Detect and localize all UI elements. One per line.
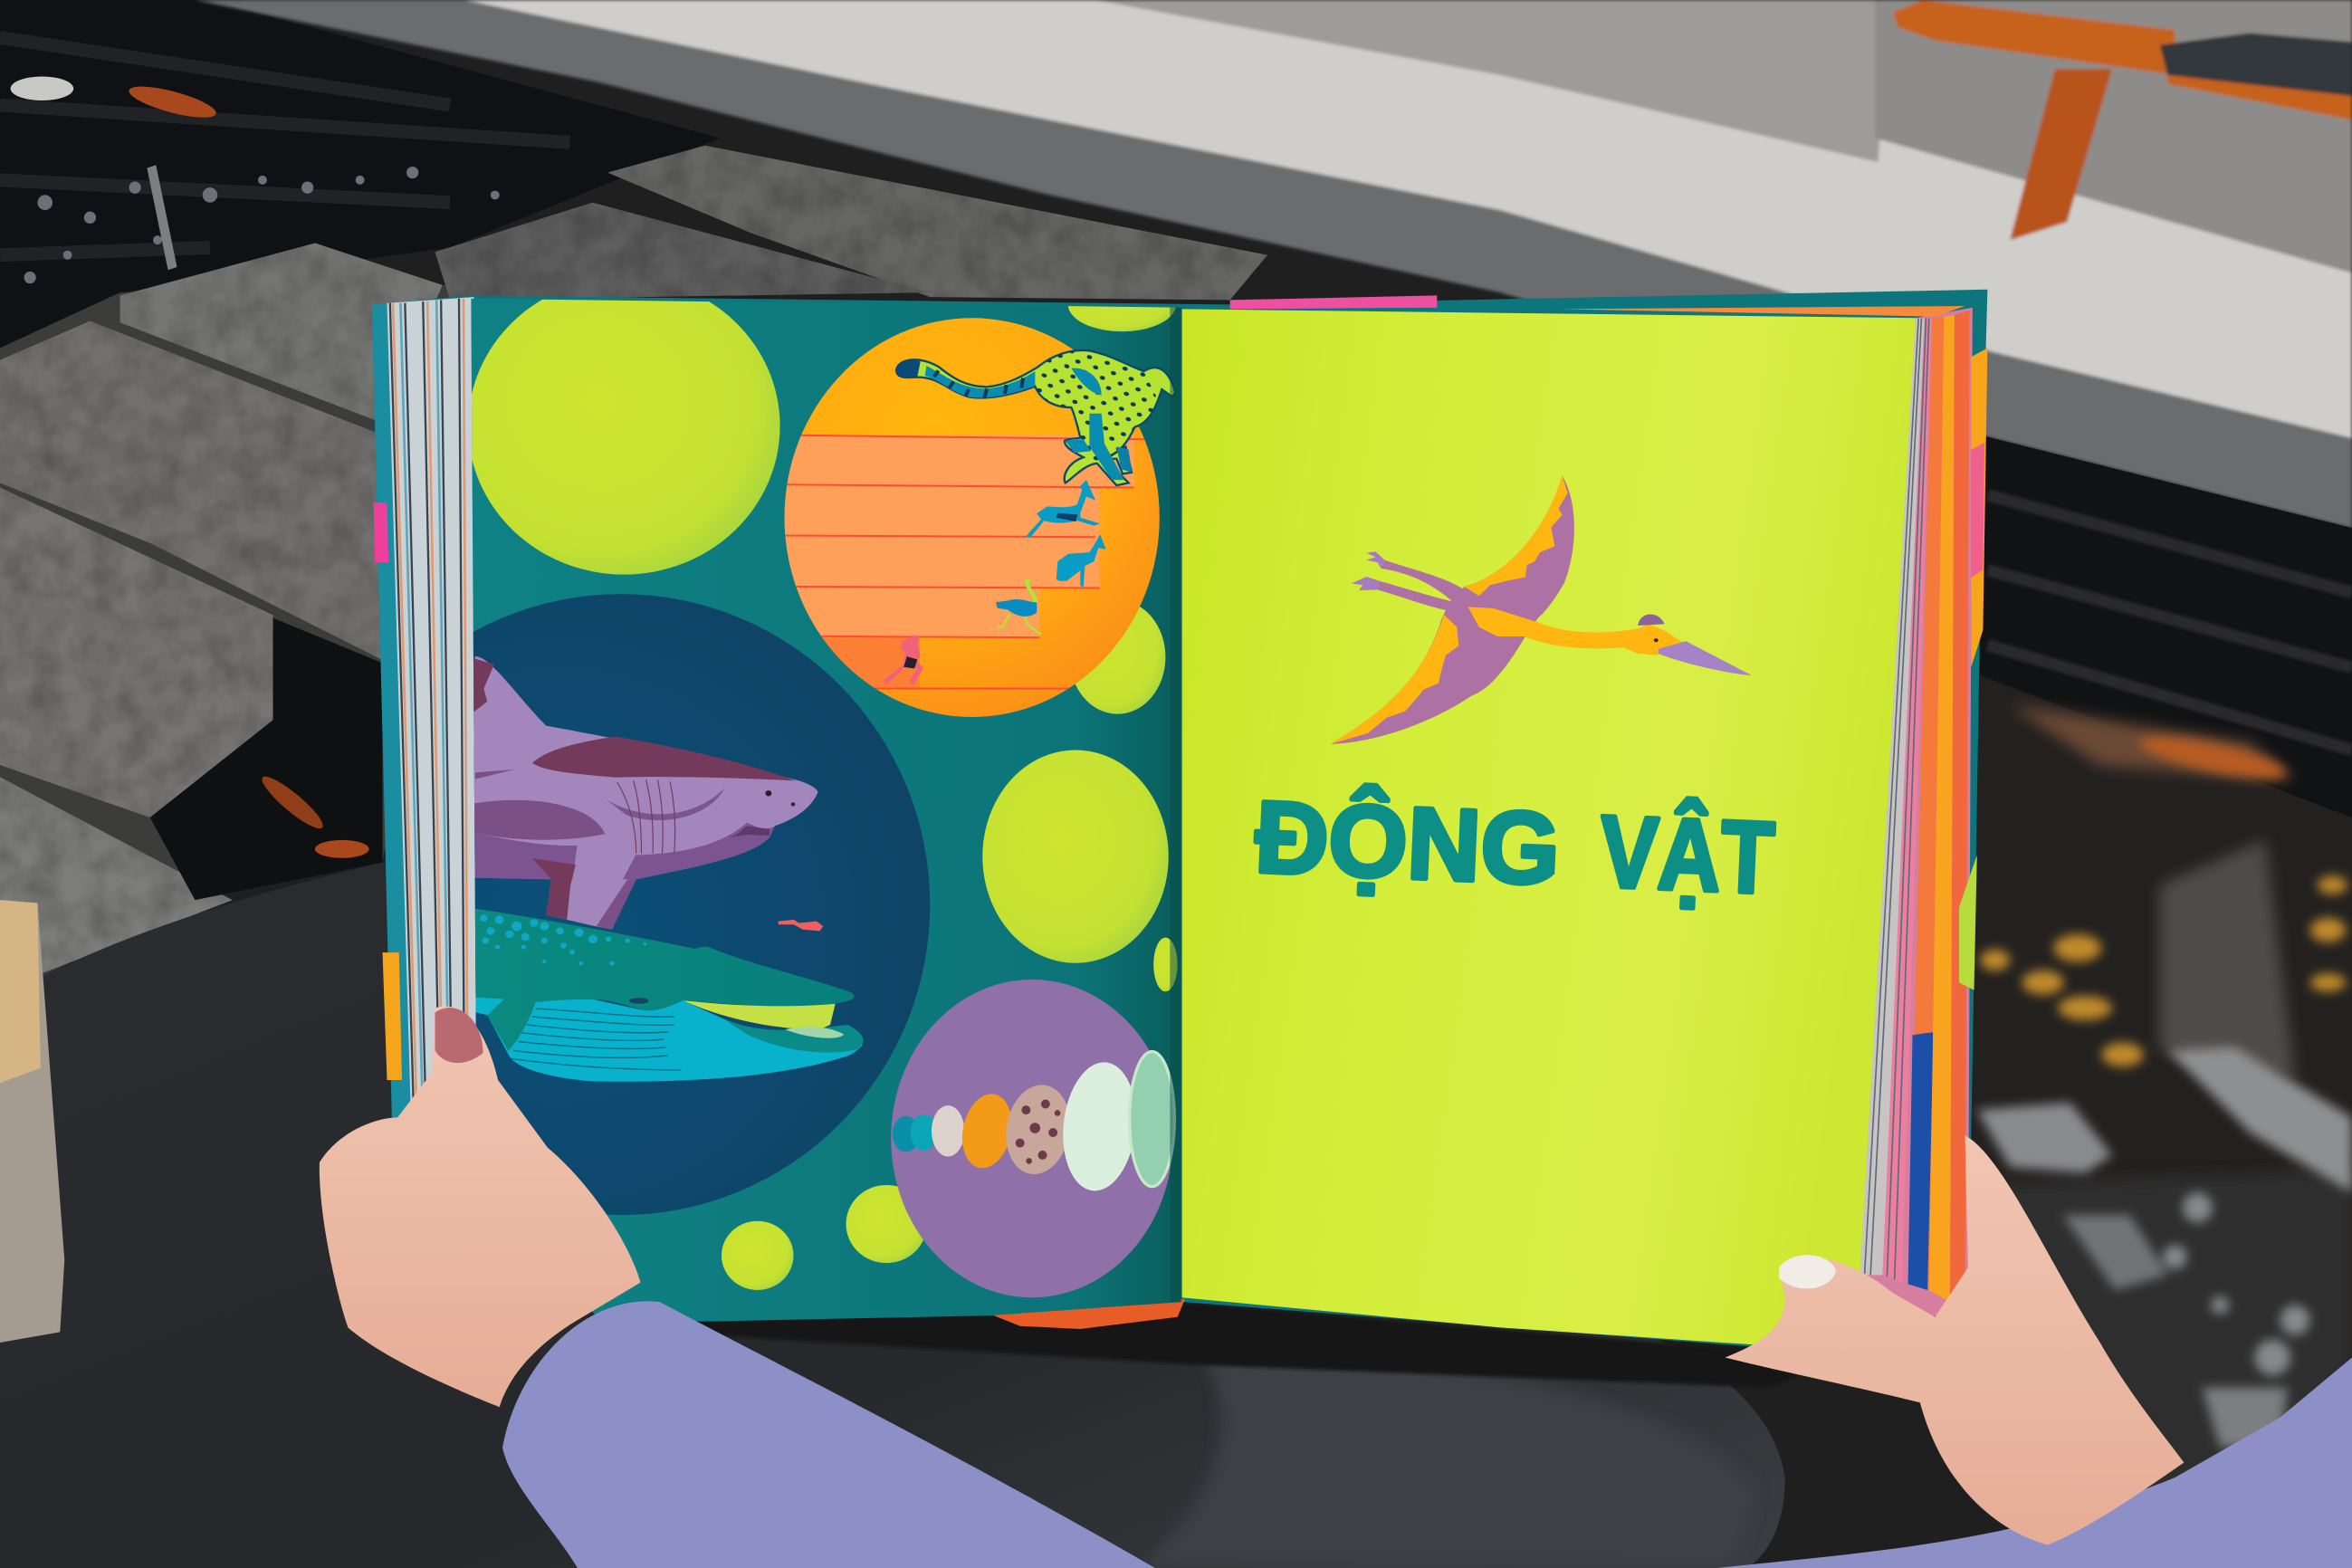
tissue box at left [0,900,64,1343]
walkway and stone steps [195,0,2352,528]
right hand [1725,1135,2184,1545]
lime circle behind sun [1076,607,1166,714]
right pond water [1973,435,2352,1500]
spine shadow [1170,308,1182,1302]
lime circle lower [846,1185,927,1263]
left page stack [372,297,477,1188]
ostrich [996,578,1041,635]
dark water with koi under stones [150,618,383,900]
right arm and hand [1717,1135,2352,1568]
speed track bands [780,435,1158,689]
egg: brown speckled [999,1080,1076,1180]
dark table [0,863,1785,1568]
back cover [372,290,1987,1353]
stone blocks [0,146,1267,990]
egg: speckled white [932,1105,964,1156]
lime circle large [982,750,1169,963]
right thumb nail [1779,1255,1836,1288]
cheetah [896,350,1175,485]
title: VẬT [1598,794,1776,915]
left arm and hand [320,1006,1155,1568]
right page [1182,306,1965,1350]
left sleeve [502,1301,1155,1568]
egg: white [1057,1058,1142,1194]
egg: pale green [1130,1052,1174,1187]
shark [466,656,818,930]
egg: orange [956,1089,1018,1172]
top edge pink strip [1230,295,1437,309]
left thumb nail [435,1008,483,1063]
whale [473,908,864,1082]
gazelle [1026,480,1100,537]
lime circle top edge [1068,306,1176,331]
left hand [320,1006,640,1407]
open book [312,278,1987,1353]
runner [884,635,923,685]
stone side faces [0,285,450,990]
title: ĐỘNG [1253,779,1562,906]
lime circle top [468,278,780,575]
lime circle small right [1153,938,1178,991]
egg: teal pair [893,1114,938,1152]
top edge orange sliver [1560,306,1965,317]
pterosaur [1331,476,1752,744]
left pond with koi [0,0,720,348]
diver [779,920,823,931]
title [1253,779,1776,915]
left page: illustrated circles [471,299,1181,1322]
book shadow on table [600,1302,1838,1388]
purple egg circle [891,980,1174,1297]
navy sea circle [473,594,931,1215]
orange running circle [780,318,1175,717]
right page stack [1833,308,1987,1350]
lime circle bottom [722,1221,793,1290]
orange ribbon at spine [990,1299,1185,1329]
antelope [1056,534,1106,587]
right sleeve [1717,1358,2352,1568]
table reflection [1140,1350,1755,1567]
